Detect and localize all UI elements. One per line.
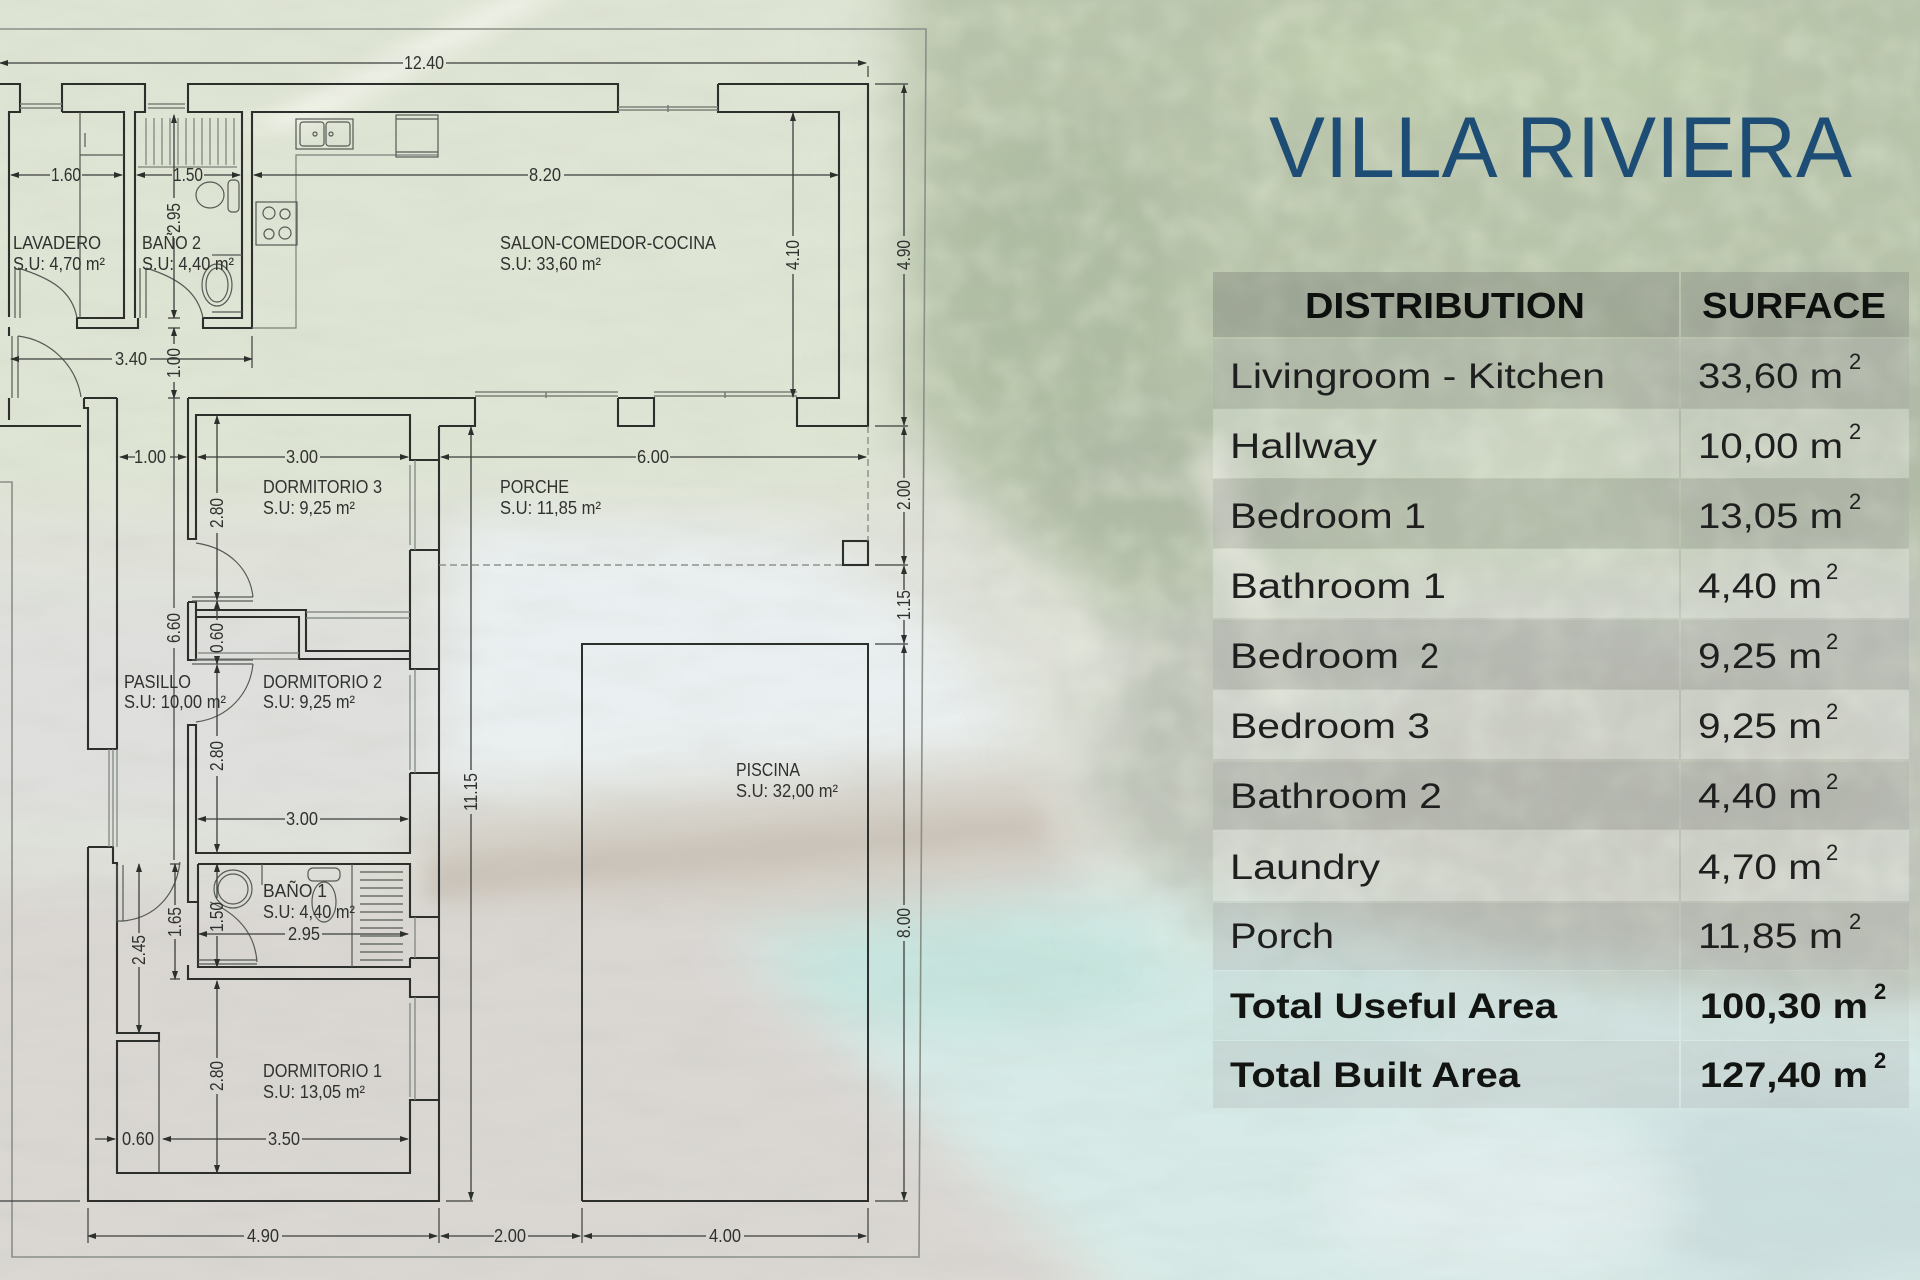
row: livingroom - kitchen: 33,60 m <box>1698 357 1843 396</box>
room label: porch <box>500 477 601 518</box>
dimension labels: 1.65 <box>165 907 185 937</box>
row: total built area: 127,40 m <box>1700 1056 1868 1095</box>
dimension labels: 2.80 <box>207 741 227 771</box>
row: total useful area: Total Useful Area <box>1230 987 1558 1026</box>
dimension labels: 3.50 <box>268 1129 300 1149</box>
room label: bathroom 1: S.U: 4,40 m² <box>263 902 355 922</box>
row: hallway: 2 <box>1849 419 1861 444</box>
walls: bedrooms, bathroom and corridor <box>84 398 439 1201</box>
row: laundry: Laundry <box>1230 848 1381 887</box>
floor plan <box>0 29 926 1257</box>
dimension labels: 2.95 <box>288 924 320 944</box>
dimension labels <box>51 53 914 1246</box>
room label: hallway: S.U: 10,00 m² <box>124 692 226 712</box>
room label: bathroom 1: BAÑO 1 <box>263 880 327 901</box>
row: hallway <box>1213 409 1909 478</box>
row: porch: 11,85 m <box>1698 917 1843 956</box>
row: livingroom - kitchen: Livingroom - Kitchen <box>1230 357 1605 396</box>
room label: pool: PISCINA <box>736 760 800 780</box>
room label: living room: S.U: 33,60 m² <box>500 254 601 274</box>
dimension labels: 1.50 <box>207 902 227 932</box>
dimension labels: 8.00 <box>894 908 914 938</box>
row: total useful area: 100,30 m <box>1700 987 1868 1026</box>
dimension labels: 3.00 <box>286 809 318 829</box>
sheet frame <box>0 29 926 1257</box>
row: bathroom 1: 4,40 m <box>1698 567 1822 606</box>
dimension labels: 4.90 <box>247 1226 279 1246</box>
room label: pool: S.U: 32,00 m² <box>736 781 838 801</box>
room label: pool <box>736 760 838 801</box>
laundry and bathroom 2 fixtures <box>80 112 242 318</box>
room label: porch: PORCHE <box>500 477 569 497</box>
row: bedroom 2: 2 <box>1420 637 1439 676</box>
room label: bedroom 3 <box>263 477 382 518</box>
row: bathroom 2: 4,40 m <box>1698 777 1822 816</box>
row: total useful area: 2 <box>1874 979 1886 1004</box>
row: total built area <box>1213 1041 1909 1108</box>
row: bathroom 2: Bathroom 2 <box>1230 777 1442 816</box>
room label: porch: S.U: 11,85 m² <box>500 498 601 518</box>
room label: bedroom 2 <box>263 672 382 712</box>
pool outline <box>582 644 868 1201</box>
row: bedroom 2: 2 <box>1826 629 1838 654</box>
dimension labels: 0.60 <box>207 623 227 653</box>
bathroom 1 fixtures <box>214 864 403 967</box>
room label: bedroom 1: S.U: 13,05 m² <box>263 1082 365 1102</box>
row: bedroom 1: Bedroom 1 <box>1230 497 1426 536</box>
row: bedroom 3: 2 <box>1826 699 1838 724</box>
room label: bathroom 2: BAÑO 2 <box>142 232 201 253</box>
row: bathroom 1: 2 <box>1826 559 1838 584</box>
dimension labels: 2.95 <box>164 203 184 233</box>
dimension labels: 6.00 <box>637 447 669 467</box>
dimension labels: 0.60 <box>122 1129 154 1149</box>
row: bedroom 1 <box>1213 479 1909 548</box>
row: bedroom 1: 13,05 m <box>1698 497 1843 536</box>
room label: bathroom 1 <box>263 880 355 922</box>
table header: DISTRIBUTION <box>1305 285 1585 326</box>
dimension labels: 2.00 <box>894 480 914 510</box>
dimension labels: 1.00 <box>134 447 166 467</box>
kitchen fixtures <box>252 115 438 328</box>
room label: living room: SALON-COMEDOR-COCINA <box>500 233 716 253</box>
room label: laundry: LAVADERO <box>13 233 101 253</box>
dimension labels: 4.00 <box>709 1226 741 1246</box>
row: porch <box>1213 903 1909 970</box>
row: bathroom 1: Bathroom 1 <box>1230 567 1446 606</box>
dimension labels: 3.40 <box>115 349 147 369</box>
row: porch: Porch <box>1230 917 1334 956</box>
room label: bedroom 3: DORMITORIO 3 <box>263 477 382 497</box>
dimension labels: 2.00 <box>494 1226 526 1246</box>
row: laundry: 2 <box>1826 840 1838 865</box>
row: laundry <box>1213 830 1909 901</box>
dimension lines <box>0 63 908 1243</box>
room label: bedroom 2: DORMITORIO 2 <box>263 672 382 692</box>
room label: bedroom 1 <box>263 1061 382 1102</box>
door swings <box>12 268 257 964</box>
room label: bedroom 1: DORMITORIO 1 <box>263 1061 382 1081</box>
title: VILLA RIVIERA <box>1269 100 1853 196</box>
row: bathroom 2: 2 <box>1826 769 1838 794</box>
dimension labels: 6.60 <box>164 613 184 643</box>
room label: hallway: PASILLO <box>124 672 191 692</box>
dimension labels: 1.00 <box>164 348 184 378</box>
row: bedroom 2 <box>1213 620 1909 689</box>
row: bedroom 3: Bedroom 3 <box>1230 707 1430 746</box>
dimension labels: 11.15 <box>461 773 481 811</box>
dimension labels: 1.15 <box>894 590 914 620</box>
row: total built area: Total Built Area <box>1230 1056 1521 1095</box>
room label: laundry: S.U: 4,70 m² <box>13 254 105 274</box>
dimension labels: 2.80 <box>207 498 227 528</box>
row: livingroom - kitchen: 2 <box>1849 349 1861 374</box>
dimension labels: 3.00 <box>286 447 318 467</box>
dimension labels: 8.20 <box>529 165 561 185</box>
row: hallway: 10,00 m <box>1698 427 1843 466</box>
row: porch: 2 <box>1849 909 1861 934</box>
row: hallway: Hallway <box>1230 427 1378 466</box>
dimension labels: 1.60 <box>51 165 81 185</box>
table header <box>1213 272 1909 337</box>
dimension labels: 4.90 <box>894 240 914 270</box>
row: total useful area <box>1213 971 1909 1040</box>
row: bedroom 1: 2 <box>1849 489 1861 514</box>
row: laundry: 4,70 m <box>1698 848 1822 887</box>
dimension labels: 2.45 <box>129 935 149 965</box>
dimension labels: 12.40 <box>404 53 444 73</box>
row: bedroom 3: 9,25 m <box>1698 707 1822 746</box>
table: surface distribution <box>1213 272 1909 1108</box>
room label: laundry <box>13 233 105 274</box>
room label: bedroom 2: S.U: 9,25 m² <box>263 692 355 712</box>
row: bathroom 1 <box>1213 549 1909 618</box>
row: bedroom 2: Bedroom <box>1230 637 1399 676</box>
row: bedroom 3 <box>1213 690 1909 759</box>
room label: bathroom 2: S.U: 4,40 m² <box>142 254 234 274</box>
table header: SURFACE <box>1702 285 1886 326</box>
row: livingroom - kitchen <box>1213 339 1909 408</box>
walls: north wing <box>0 84 868 426</box>
dimension labels: 4.10 <box>783 240 803 270</box>
dimension labels: 1.50 <box>173 165 203 185</box>
room label: living room <box>500 233 716 274</box>
row: bedroom 2: 9,25 m <box>1698 637 1822 676</box>
row: bathroom 2 <box>1213 762 1909 829</box>
row: total built area: 2 <box>1874 1048 1886 1073</box>
porch column and dashed edge <box>439 426 868 565</box>
room label: hallway <box>124 672 226 712</box>
room label: bathroom 2 <box>142 232 234 274</box>
dimension labels: 2.80 <box>207 1061 227 1091</box>
room label: bedroom 3: S.U: 9,25 m² <box>263 498 355 518</box>
